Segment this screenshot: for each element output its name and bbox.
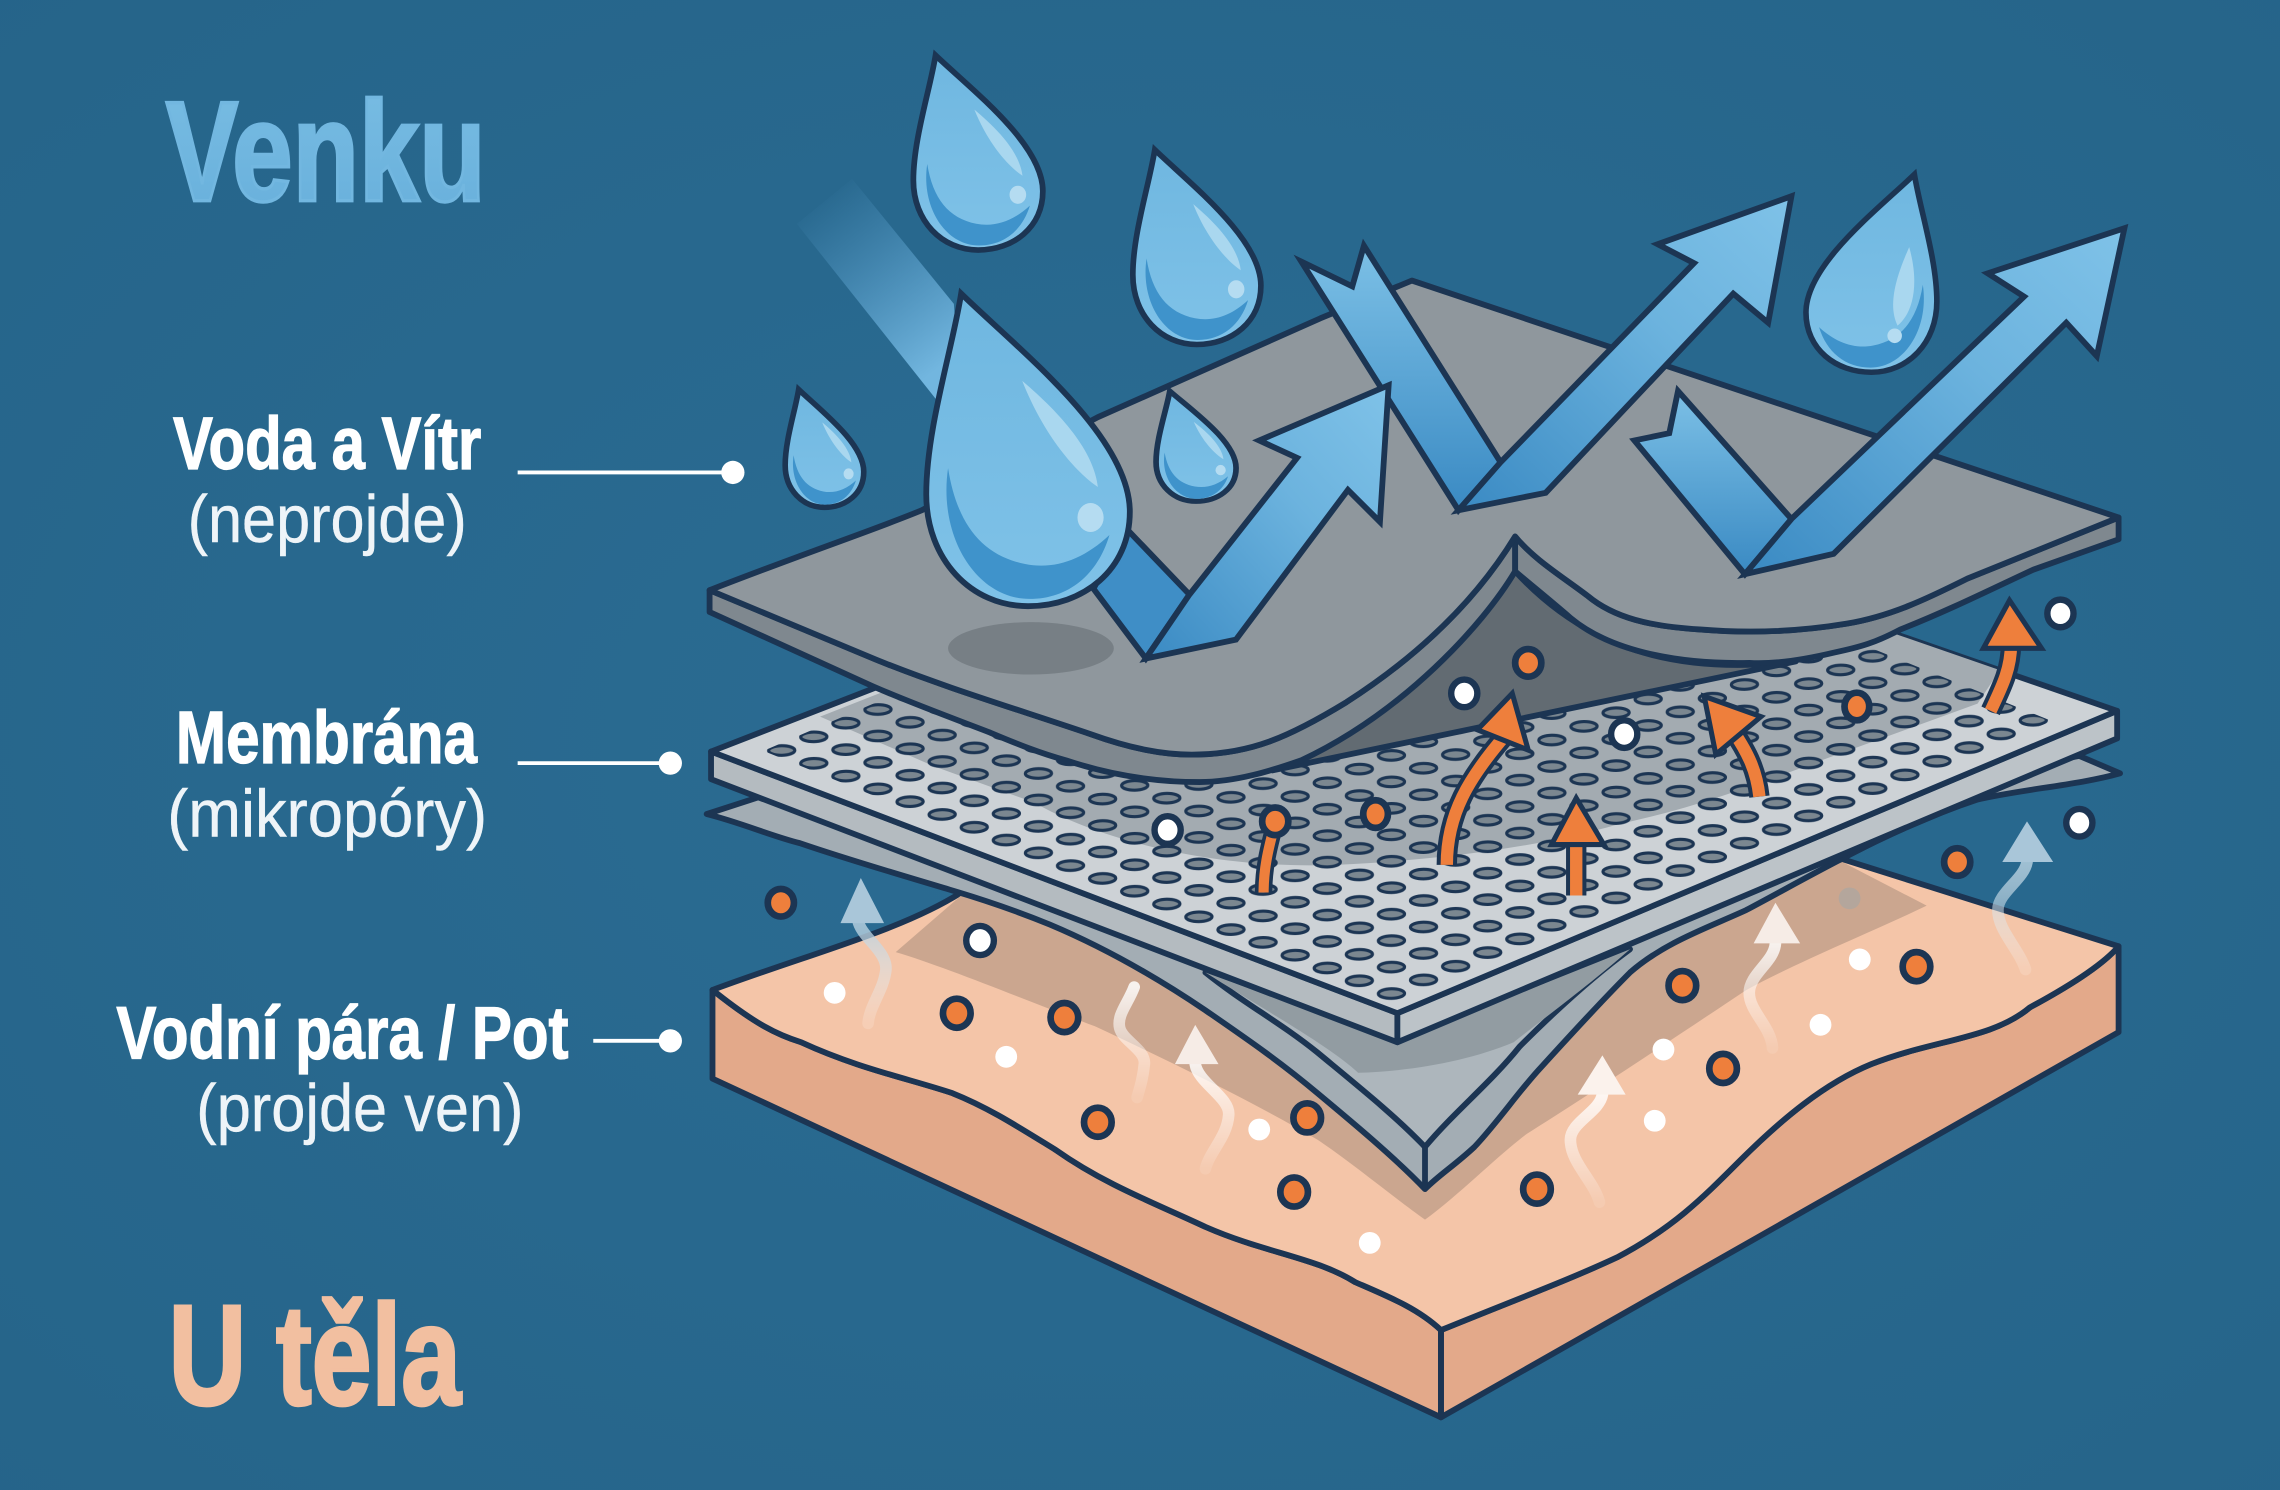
label: Voda a Vítr: (neprojde) [188,482,467,557]
vapor arrow 4 [1749,903,1800,1048]
label: Membrána [167,696,487,852]
water drop, top centre [1133,150,1261,345]
label: Membrána: (mikropóry) [167,777,487,852]
label: Membrána: Membrána [176,696,478,779]
orange arrow, curved back [1704,696,1761,797]
vapor particles: white on skin [824,887,1871,1254]
label: Vodní pára / Pot [116,991,569,1146]
water drop, large [926,294,1130,606]
shadow of big drop [948,622,1114,674]
leader line: water and wind [518,461,744,484]
skin layer block [712,859,2119,1417]
vapor arrow 3 [1175,1025,1229,1169]
label: Voda a Vítr [173,402,481,557]
water drop, small left [785,390,864,507]
water drop, top left [913,55,1043,250]
orange arrow, short [1264,829,1274,893]
title: U těla: U těla [169,1276,462,1435]
label: Vodní pára / Pot: Vodní pára / Pot [116,991,569,1074]
leader line: membrane [518,752,682,775]
vapor arrow 6 [1998,821,2053,970]
orange arrow, straight [1552,798,1604,895]
outer shell: top sheet [710,281,2119,782]
vapor arrow 1 [840,878,886,1023]
vapor particles: orange [768,649,1970,1207]
label: Vodní pára / Pot: (projde ven) [196,1071,523,1146]
vapor trail 2 [1119,987,1144,1098]
title: Venku: Venku [166,73,486,232]
orange arrow, top right [1983,600,2042,711]
water drop, right [1806,174,1937,372]
vapor particles: white ringed [966,600,2092,955]
label: Voda a Vítr: Voda a Vítr [173,402,481,485]
incoming wind streak [797,179,961,414]
lower sheet of membrane [707,756,2120,1189]
wind arrow 1 [1093,385,1389,659]
orange arrows through the membrane [1264,600,2042,895]
vapor arrow 5 [1570,1055,1626,1202]
wind arrow 2 [1301,196,1791,510]
orange arrow, main [1447,693,1528,865]
wind arrow 3 [1634,228,2124,574]
vapor arrows on skin [840,821,2053,1202]
water drop, small centre [1156,391,1236,501]
membrane layer with micropores [708,632,2120,1046]
leader line: vapor [593,1029,682,1052]
